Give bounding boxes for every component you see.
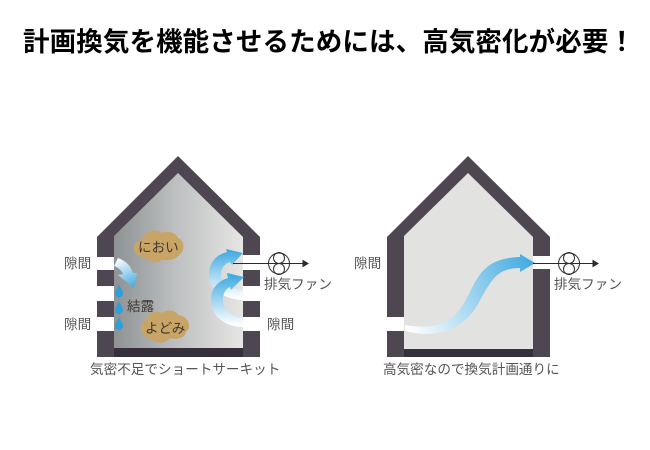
- house interior: [404, 173, 533, 349]
- house wall: [387, 156, 550, 357]
- cloud: stagnation: [141, 311, 189, 343]
- panel: left house, short circuit: [64, 156, 332, 377]
- label: gap upper: 隙間: [64, 256, 91, 271]
- label: gap lower: 隙間: [64, 317, 91, 332]
- arrow: short circuit upper: [209, 249, 243, 300]
- house interior: [114, 173, 243, 348]
- cloud: odor: におい: [138, 240, 179, 255]
- fan and exhaust line: [233, 252, 308, 274]
- cloud: stagnation: よどみ: [145, 321, 185, 336]
- left wall gaps: [96, 257, 114, 331]
- label: gap right: 隙間: [267, 317, 294, 332]
- house wall: [97, 156, 260, 357]
- label: condensation: 結露: [127, 299, 155, 314]
- floor: [114, 348, 243, 357]
- caption: 気密不足でショートサーキット: [90, 362, 280, 377]
- arrow: planned airflow: [405, 254, 535, 334]
- title: 計画換気を機能させるためには、高気密化が必要！: [23, 27, 635, 57]
- right wall gaps: [243, 255, 261, 331]
- right wall gap: [533, 256, 551, 269]
- fan and exhaust line: [533, 252, 598, 274]
- floor: [404, 349, 533, 357]
- label: gap: 隙間: [354, 256, 381, 271]
- panel: right house, planned ventilation: [354, 156, 622, 377]
- arrow: air entering top gap: [114, 258, 137, 288]
- cloud: odor: [134, 231, 183, 262]
- arrow: short circuit lower: [211, 273, 244, 327]
- label: exhaust fan: 排気ファン: [554, 277, 622, 292]
- water drops: [115, 284, 123, 330]
- caption: 高気密なので換気計画通りに: [383, 361, 560, 377]
- left wall gap: [386, 317, 404, 331]
- label: exhaust fan: 排気ファン: [264, 277, 332, 292]
